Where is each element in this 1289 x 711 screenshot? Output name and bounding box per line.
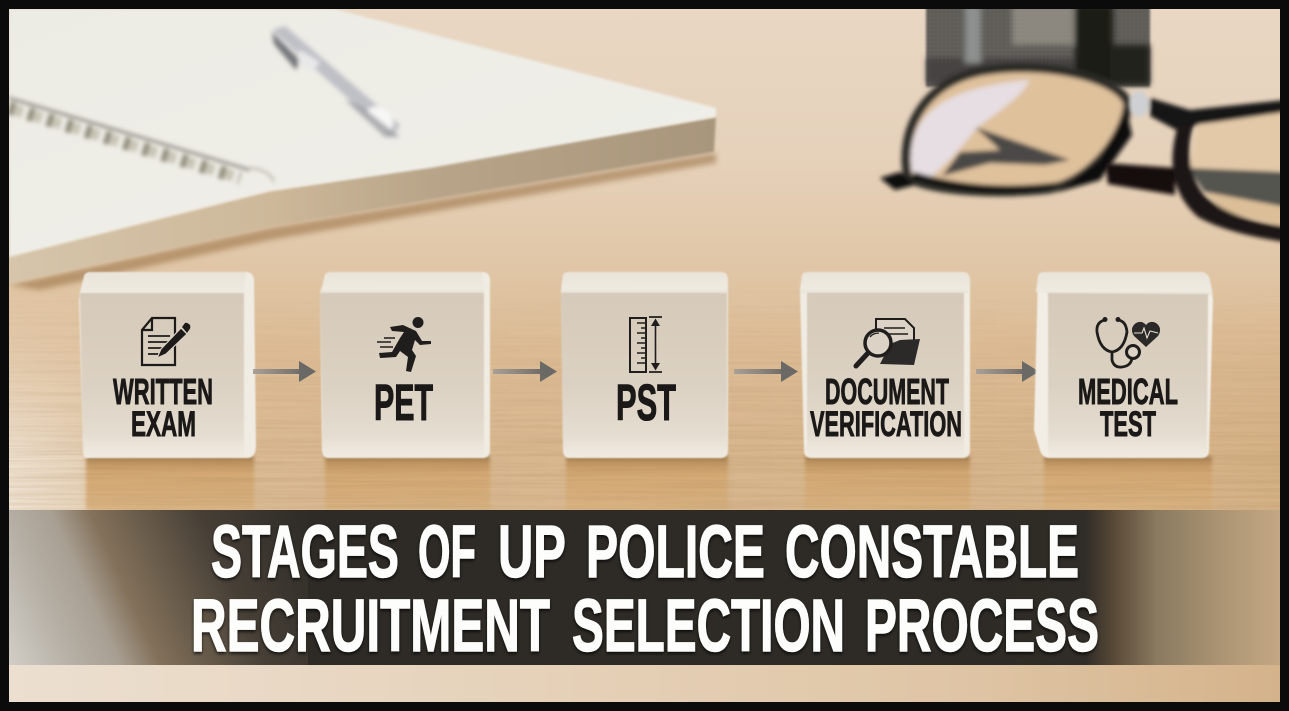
icon: stethoscope and heart <box>1097 317 1160 367</box>
icon: folder with magnifier <box>856 319 920 366</box>
icon: runner <box>377 317 431 372</box>
block 5: medical test <box>1034 272 1213 458</box>
title: STAGES <box>211 510 399 593</box>
block reflections on the desk <box>86 457 1212 510</box>
arrow 2 <box>493 361 557 382</box>
arrow 3 <box>734 361 798 382</box>
pen holder and glasses <box>880 5 1285 242</box>
title banner <box>9 510 1280 667</box>
spiral binding <box>9 98 274 182</box>
pen <box>272 26 400 138</box>
wood grain <box>9 371 1280 510</box>
block 2: PET <box>320 272 490 458</box>
label: PET: PET <box>374 374 433 431</box>
notebook with spiral binding <box>9 9 716 290</box>
left lens <box>880 68 1132 192</box>
label: written exam: WRITTEN <box>113 371 213 412</box>
title: UP <box>498 510 565 593</box>
block 3: PST <box>561 272 728 458</box>
icon: document and pencil <box>142 318 190 365</box>
mesh pen holder <box>926 5 1150 87</box>
nose bridge and right frame <box>1105 91 1285 242</box>
title: OF <box>418 510 476 593</box>
label: medical test <box>1079 378 1178 437</box>
label: document verification <box>810 378 961 437</box>
title: SELECTION <box>572 584 845 667</box>
title: PROCESS <box>865 584 1099 667</box>
arrow 1 <box>253 361 316 382</box>
block 4: document verification <box>800 272 970 458</box>
label: written exam: EXAM <box>131 405 196 444</box>
label: written exam <box>112 378 212 436</box>
title: CONSTABLE <box>785 510 1079 593</box>
label: document verification: VERIFICATION <box>810 405 962 444</box>
title <box>192 524 1099 656</box>
label: medical test: TEST <box>1100 405 1156 444</box>
icon: ruler and height arrow <box>630 317 662 372</box>
arrow 4 <box>976 361 1039 382</box>
label: medical test: MEDICAL <box>1078 371 1178 412</box>
title: RECRUITMENT <box>191 584 550 667</box>
title: POLICE <box>586 510 765 593</box>
block 1: written exam <box>79 272 256 458</box>
label: PST: PST <box>616 374 676 431</box>
label: document verification: DOCUMENT <box>825 371 949 412</box>
